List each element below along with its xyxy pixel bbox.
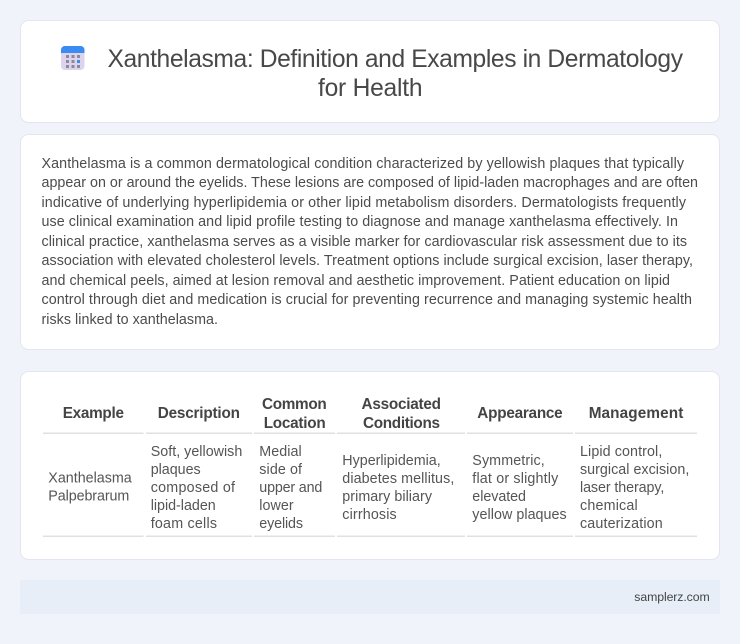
text block: definition paragraph: use clinical examination and lipid profile testing to diagnose and manage xanthelasma effectively. In [42, 214, 678, 230]
table header row: Management [589, 405, 683, 422]
cell: description: foam cells [151, 516, 217, 532]
table header row: Associated [362, 396, 441, 413]
title [108, 46, 684, 102]
cell: example [48, 470, 132, 504]
cell: management: chemical [580, 498, 638, 514]
cell: common location: lower [259, 498, 294, 514]
cell: appearance: elevated [472, 489, 526, 505]
panel: title card [20, 20, 720, 122]
footer bar [20, 580, 720, 614]
cell: appearance: flat or slightly [472, 471, 559, 487]
cell: common location: side of [259, 462, 302, 478]
cell: management: laser therapy, [580, 480, 664, 496]
table rules [43, 432, 697, 537]
table header row: Location [264, 415, 326, 432]
table header row [63, 396, 683, 432]
cell: associated conditions: cirrhosis [342, 507, 397, 523]
cell: management: cauterization [580, 516, 663, 532]
table header row: Example [63, 405, 124, 422]
text block: definition paragraph: Xanthelasma is a common dermatological condition characterized by yellowish plaques that typically [42, 156, 685, 172]
panel: definition text [20, 134, 720, 350]
text block: definition paragraph [42, 156, 698, 328]
text block: definition paragraph: clinical practice, xanthelasma serves as a visible marker for cardiovascular risk assessment due to its [42, 234, 687, 250]
cell: management: surgical excision, [580, 462, 689, 478]
icon: calendar [61, 46, 84, 70]
text block: definition paragraph: control through diet and medication is crucial for preventing recurrence and managing systemic health [42, 292, 692, 308]
table header row: Appearance [477, 405, 563, 422]
panel: examples table [20, 372, 720, 560]
cell: common location: upper and [259, 480, 322, 496]
cell: description: composed of [151, 480, 235, 496]
cell: appearance [472, 453, 567, 523]
cell: example: Xanthelasma [48, 470, 132, 486]
text block: definition paragraph: appear on or around the eyelids. These lesions are composed of lipid-laden macrophages and are often [42, 175, 698, 191]
cell: common location [259, 444, 322, 532]
cell: appearance: yellow plaques [472, 507, 567, 523]
cell: description: lipid-laden [151, 498, 216, 514]
cell: associated conditions [342, 453, 454, 523]
cell: description: Soft, yellowish [151, 444, 242, 460]
cell: associated conditions: primary biliary [342, 489, 433, 505]
cell: example: Palpebrarum [48, 488, 129, 504]
table header row: Common [262, 396, 327, 413]
cell: common location: Medial [259, 444, 302, 460]
cell: associated conditions: Hyperlipidemia, [342, 453, 441, 469]
text block: definition paragraph: indicative of underlying hyperlipidemia or other lipid metabolism disorders. Dermatologists frequently [42, 195, 687, 211]
title: Xanthelasma: Definition and Examples in Dermatology [108, 46, 684, 73]
cell: appearance: Symmetric, [472, 453, 545, 469]
table header row: Description [158, 405, 240, 422]
text block: definition paragraph: association with elevated cholesterol levels. Treatment options include surgical excision, laser therapy, [42, 253, 693, 269]
cell: associated conditions: diabetes mellitus, [342, 471, 454, 487]
cell: management [580, 444, 689, 532]
title: for Health [318, 75, 422, 102]
text block: definition paragraph: and chemical peels, aimed at lesion removal and aesthetic improvement. Patient education on lipid [42, 273, 670, 289]
cell: description: plaques [151, 462, 201, 478]
text block: definition paragraph: risks linked to xanthelasma. [42, 312, 218, 328]
table data row [48, 444, 689, 532]
cell: description [151, 444, 242, 532]
cell: common location: eyelids [259, 516, 303, 532]
table header row: Conditions [363, 415, 440, 432]
footer source text: samplerz.com [634, 590, 710, 604]
cell: management: Lipid control, [580, 444, 662, 460]
